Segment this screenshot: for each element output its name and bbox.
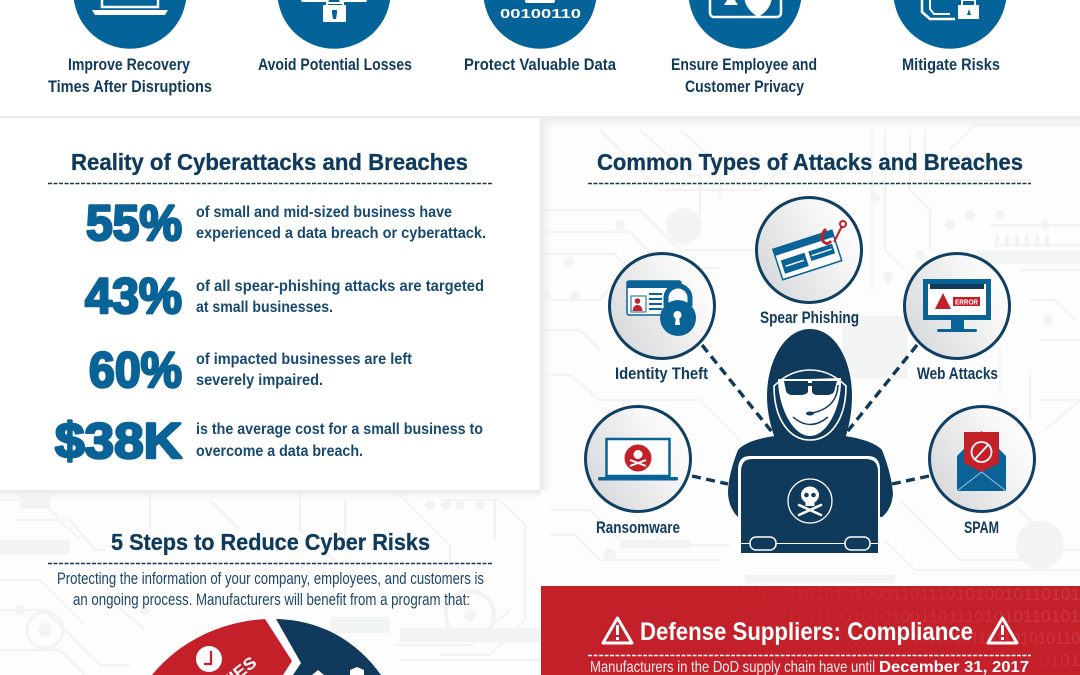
- label: identity theft: Identity Theft: [615, 365, 708, 383]
- panel: benefits band: [0, 0, 1080, 116]
- icon: chip and lock: [893, 0, 1007, 49]
- headset mic: [812, 385, 838, 413]
- shoulders and arms: [728, 436, 893, 517]
- face: [778, 378, 841, 436]
- band shadow: [0, 116, 1080, 128]
- stat: 55%: of small and mid-sized business have: [196, 204, 452, 221]
- label: ensure employee and customer privacy: [671, 56, 817, 96]
- heading: reality of cyberattacks: Reality of Cyberattacks and Breaches: [71, 149, 468, 175]
- binary texture: [700, 585, 1080, 670]
- stat: 43%: of all spear-phishing attacks are targeted: [196, 278, 484, 295]
- label: spear phishing: Spear Phishing: [760, 309, 859, 327]
- stat: 55%: [86, 195, 486, 251]
- stat: 43%: [85, 268, 484, 324]
- icon: binary data: [483, 0, 597, 49]
- label: improve recovery: Improve Recovery: [68, 56, 191, 74]
- icon: spam: [930, 406, 1034, 512]
- label: improve recovery: Times After Disruptions: [48, 78, 212, 96]
- icon: ransomware: [586, 406, 690, 512]
- stat: 55%: experienced a data breach or cyberattack.: [196, 225, 486, 242]
- icon: warning left: [603, 618, 632, 643]
- stat: 55%: 55%: [86, 195, 182, 251]
- stat: $38K: overcome a data breach.: [196, 443, 363, 460]
- binary texture: 1010110100101010100011011101010010110101: [700, 585, 1080, 604]
- illustration: hacker at laptop: [728, 329, 893, 553]
- stat: $38K: [55, 413, 483, 469]
- stat: 60%: severely impaired.: [196, 372, 323, 389]
- icon: web attacks: ERROR: [955, 300, 978, 306]
- stat: $38K: is the average cost for a small business to: [196, 421, 483, 438]
- stat: 43%: 43%: [85, 268, 182, 324]
- laptop: [738, 456, 880, 553]
- text: 5 steps intro: an ongoing process. Manufacturers will benefit from a program that:: [73, 591, 470, 609]
- heading: common types of attacks: Common Types of Attacks and Breaches: [597, 149, 1023, 175]
- hood: [767, 329, 852, 442]
- label: mitigate risks: Mitigate Risks: [902, 56, 1000, 74]
- skull emblem: [788, 479, 832, 523]
- icon: spear phishing: [756, 198, 862, 302]
- label: ensure employee and customer privacy: Customer Privacy: [685, 78, 805, 96]
- icon: identity theft: [610, 254, 714, 358]
- label: improve recovery: [48, 56, 212, 96]
- label: avoid potential losses: Avoid Potential Losses: [258, 56, 412, 74]
- hood opening: [774, 370, 846, 440]
- stat: 43%: at small businesses.: [196, 299, 333, 316]
- stat: $38K: $38K: [55, 413, 182, 469]
- text: 5 steps intro: [57, 570, 484, 609]
- icon: ID card and shield: [688, 0, 802, 49]
- icon: binary data: 00100110: [500, 7, 581, 21]
- heading: defense suppliers: Defense Suppliers: Compliance: [640, 618, 973, 646]
- sunglasses: [784, 381, 837, 395]
- connectors to hacker: [692, 345, 929, 484]
- segment: identifies: [152, 619, 292, 675]
- label: ensure employee and customer privacy: Ensure Employee and: [671, 56, 817, 74]
- label: protect valuable data: Protect Valuable Data: [464, 56, 617, 74]
- panel: reality of cyberattacks background: [0, 118, 540, 490]
- icon: laptop recovery: [73, 0, 187, 49]
- label: spam: SPAM: [964, 519, 999, 537]
- binary texture: 0110100101101100101010011011101010110101: [700, 607, 1080, 626]
- chart: 5 steps wheel: [152, 619, 381, 675]
- icon: web attacks: [904, 254, 1010, 358]
- stat: 60%: 60%: [89, 342, 182, 398]
- panel: defense suppliers compliance: [541, 585, 1080, 675]
- stat: 60%: [89, 342, 413, 398]
- stat: 60%: of impacted businesses are left: [196, 351, 413, 368]
- label: web attacks: Web Attacks: [917, 365, 998, 383]
- heading: 5 steps: 5 Steps to Reduce Cyber Risks: [111, 529, 430, 555]
- text: 5 steps intro: Protecting the information of your company, employees, and customers is: [57, 570, 484, 588]
- icon: padlock losses: [277, 0, 391, 49]
- label: ransomware: Ransomware: [596, 519, 680, 537]
- icon: warning right: [988, 618, 1017, 643]
- segment: protects: [276, 619, 381, 675]
- binary texture: 10101: [1030, 651, 1080, 670]
